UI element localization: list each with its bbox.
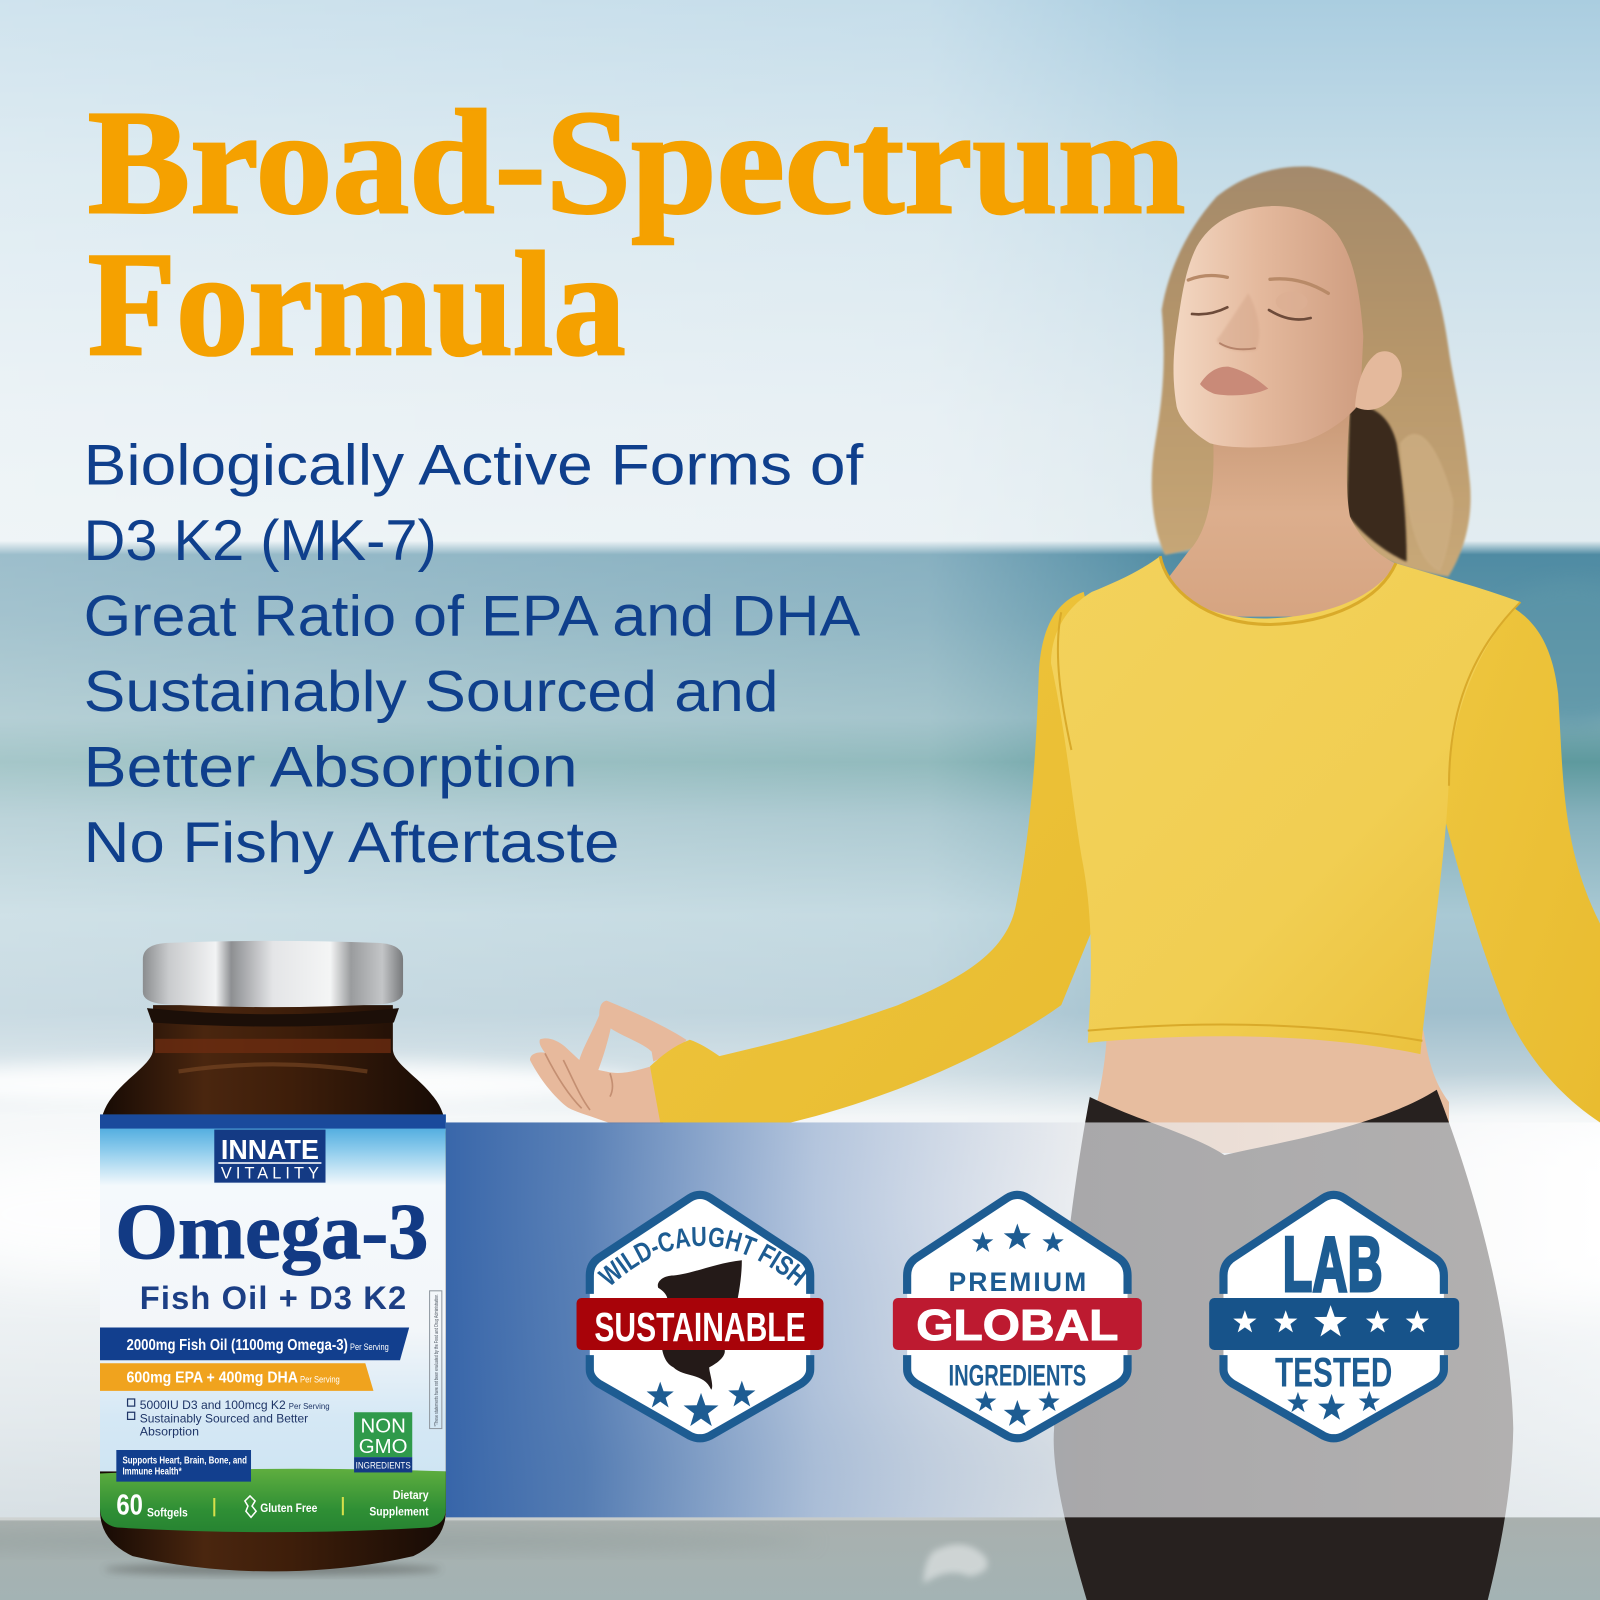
brand logo: INNATE bbox=[221, 1134, 319, 1165]
non-GMO seal: NON bbox=[361, 1416, 406, 1438]
benefit 1: Biologically Active Forms of bbox=[84, 434, 863, 498]
red ribbon bbox=[577, 1298, 823, 1350]
benefit 4: Better Absorption bbox=[84, 736, 578, 800]
badge body bbox=[1223, 1195, 1444, 1438]
fish silhouette bbox=[658, 1260, 742, 1390]
ingredients text: INGREDIENTS bbox=[948, 1360, 1086, 1393]
label bullet list bbox=[128, 1398, 330, 1439]
eyebrow right bbox=[1270, 279, 1328, 293]
health claim box bbox=[116, 1450, 251, 1482]
bottle shadow bbox=[104, 1563, 441, 1576]
benefit 3: Sustainably Sourced and bbox=[84, 660, 779, 724]
tested text: TESTED bbox=[1275, 1349, 1392, 1396]
title bbox=[88, 79, 1186, 387]
light hair strands bbox=[1400, 434, 1453, 572]
nostrils bbox=[1220, 343, 1255, 349]
ear bbox=[1355, 351, 1402, 410]
bottom stars bbox=[1287, 1391, 1380, 1420]
badge outline bbox=[590, 1195, 810, 1438]
fish oil dose: 2000mg Fish Oil (1100mg Omega-3) bbox=[127, 1337, 348, 1354]
benefits list bbox=[84, 434, 863, 875]
shirt torso bbox=[1051, 556, 1520, 1054]
eye closed right bbox=[1269, 310, 1311, 320]
badge: premium global ingredients bbox=[893, 1195, 1142, 1438]
orange banner bbox=[100, 1363, 373, 1391]
label top strip bbox=[100, 1114, 446, 1129]
lab text: LAB bbox=[1283, 1222, 1383, 1308]
neck ring and amber highlight bbox=[147, 1008, 399, 1053]
red ribbon bbox=[893, 1298, 1142, 1350]
nose bbox=[1217, 293, 1259, 351]
yellow separators bbox=[214, 1497, 343, 1516]
softgel count: Softgels bbox=[147, 1505, 188, 1519]
shoulder sheen bbox=[179, 1064, 367, 1071]
product bottle bbox=[100, 941, 446, 1576]
softgel count: 60 bbox=[116, 1489, 143, 1521]
neck bbox=[1150, 410, 1420, 617]
top stars bbox=[972, 1223, 1064, 1252]
right sleeve bbox=[1434, 592, 1600, 1122]
product name: Omega-3 bbox=[115, 1189, 428, 1276]
badge stars bbox=[647, 1381, 755, 1426]
benefit 5: No Fishy Aftertaste bbox=[84, 811, 619, 875]
label bullet list: 5000IU D3 and 100mcg K2 bbox=[140, 1398, 286, 1412]
face bbox=[1174, 206, 1363, 447]
bottle glass bbox=[100, 1005, 446, 1571]
grass bbox=[100, 1468, 446, 1532]
premium text: PREMIUM bbox=[948, 1267, 1086, 1297]
badge arc text: WILD-CAUGHT FISH bbox=[597, 1226, 806, 1286]
dietary supplement: Supplement bbox=[369, 1504, 429, 1518]
benefit 1 continued: D3 K2 (MK-7) bbox=[84, 509, 437, 573]
translucent badge band bbox=[446, 1122, 1600, 1517]
EPA DHA dose: 600mg EPA + 400mg DHA bbox=[127, 1370, 298, 1387]
blue banner bbox=[100, 1328, 409, 1360]
label bullet list: Sustainably Sourced and Better bbox=[140, 1411, 308, 1425]
brand logo: VITALITY bbox=[221, 1165, 319, 1183]
non-GMO seal: GMO bbox=[359, 1436, 408, 1458]
gluten free bbox=[245, 1496, 318, 1517]
left sleeve bbox=[650, 592, 1112, 1122]
product subtitle: Fish Oil + D3 K2 bbox=[140, 1279, 406, 1316]
dietary supplement bbox=[369, 1488, 429, 1518]
hand bbox=[530, 1001, 687, 1123]
badge outline bbox=[1223, 1195, 1444, 1438]
health claim box: Supports Heart, Brain, Bone, and bbox=[122, 1455, 247, 1466]
FDA disclaimer bbox=[430, 1291, 442, 1429]
belly bbox=[1082, 1031, 1449, 1153]
benefit 2: Great Ratio of EPA and DHA bbox=[84, 585, 860, 649]
title line 2: Formula bbox=[88, 221, 626, 387]
FDA disclaimer: *These statements have not been evaluated by the Food and Drug Administration. bbox=[434, 1294, 440, 1427]
badge body bbox=[907, 1195, 1128, 1438]
fish oil dose: Per Serving bbox=[350, 1342, 389, 1352]
gluten free: Gluten Free bbox=[260, 1501, 318, 1515]
badge body bbox=[590, 1195, 810, 1438]
eye closed left bbox=[1192, 307, 1227, 314]
eyebrow left bbox=[1188, 276, 1227, 280]
hair mass bbox=[1152, 166, 1471, 577]
badge outline bbox=[907, 1195, 1128, 1438]
non-GMO seal bbox=[354, 1412, 412, 1472]
dietary supplement: Dietary bbox=[393, 1488, 429, 1502]
label bbox=[100, 1114, 446, 1551]
blue ribbon with stars bbox=[1209, 1298, 1459, 1350]
badge: sustainable wild-caught fish bbox=[576, 1190, 824, 1442]
woman meditating bbox=[530, 166, 1600, 1600]
brand logo bbox=[214, 1130, 326, 1183]
dark hair behind neck bbox=[1347, 406, 1407, 562]
head and hair bbox=[1150, 166, 1471, 617]
badge: lab tested bbox=[1209, 1195, 1459, 1438]
non-GMO seal: INGREDIENTS bbox=[356, 1460, 411, 1470]
eyelids bbox=[1276, 292, 1308, 312]
softgel count bbox=[116, 1489, 188, 1521]
ribbon text: GLOBAL bbox=[916, 1301, 1118, 1350]
lips bbox=[1200, 367, 1268, 395]
cap bbox=[143, 941, 403, 1007]
leggings bbox=[1054, 1090, 1513, 1600]
shirt seams bbox=[1058, 556, 1520, 1041]
label bullet list: Absorption bbox=[140, 1425, 199, 1439]
health claim box: Immune Health* bbox=[122, 1466, 182, 1477]
label bullet list: Per Serving bbox=[289, 1402, 330, 1411]
EPA DHA dose: Per Serving bbox=[300, 1375, 340, 1385]
ribbon text: SUSTAINABLE bbox=[594, 1304, 806, 1350]
title line 1: Broad-Spectrum bbox=[88, 79, 1186, 245]
bottom stars bbox=[975, 1391, 1060, 1426]
